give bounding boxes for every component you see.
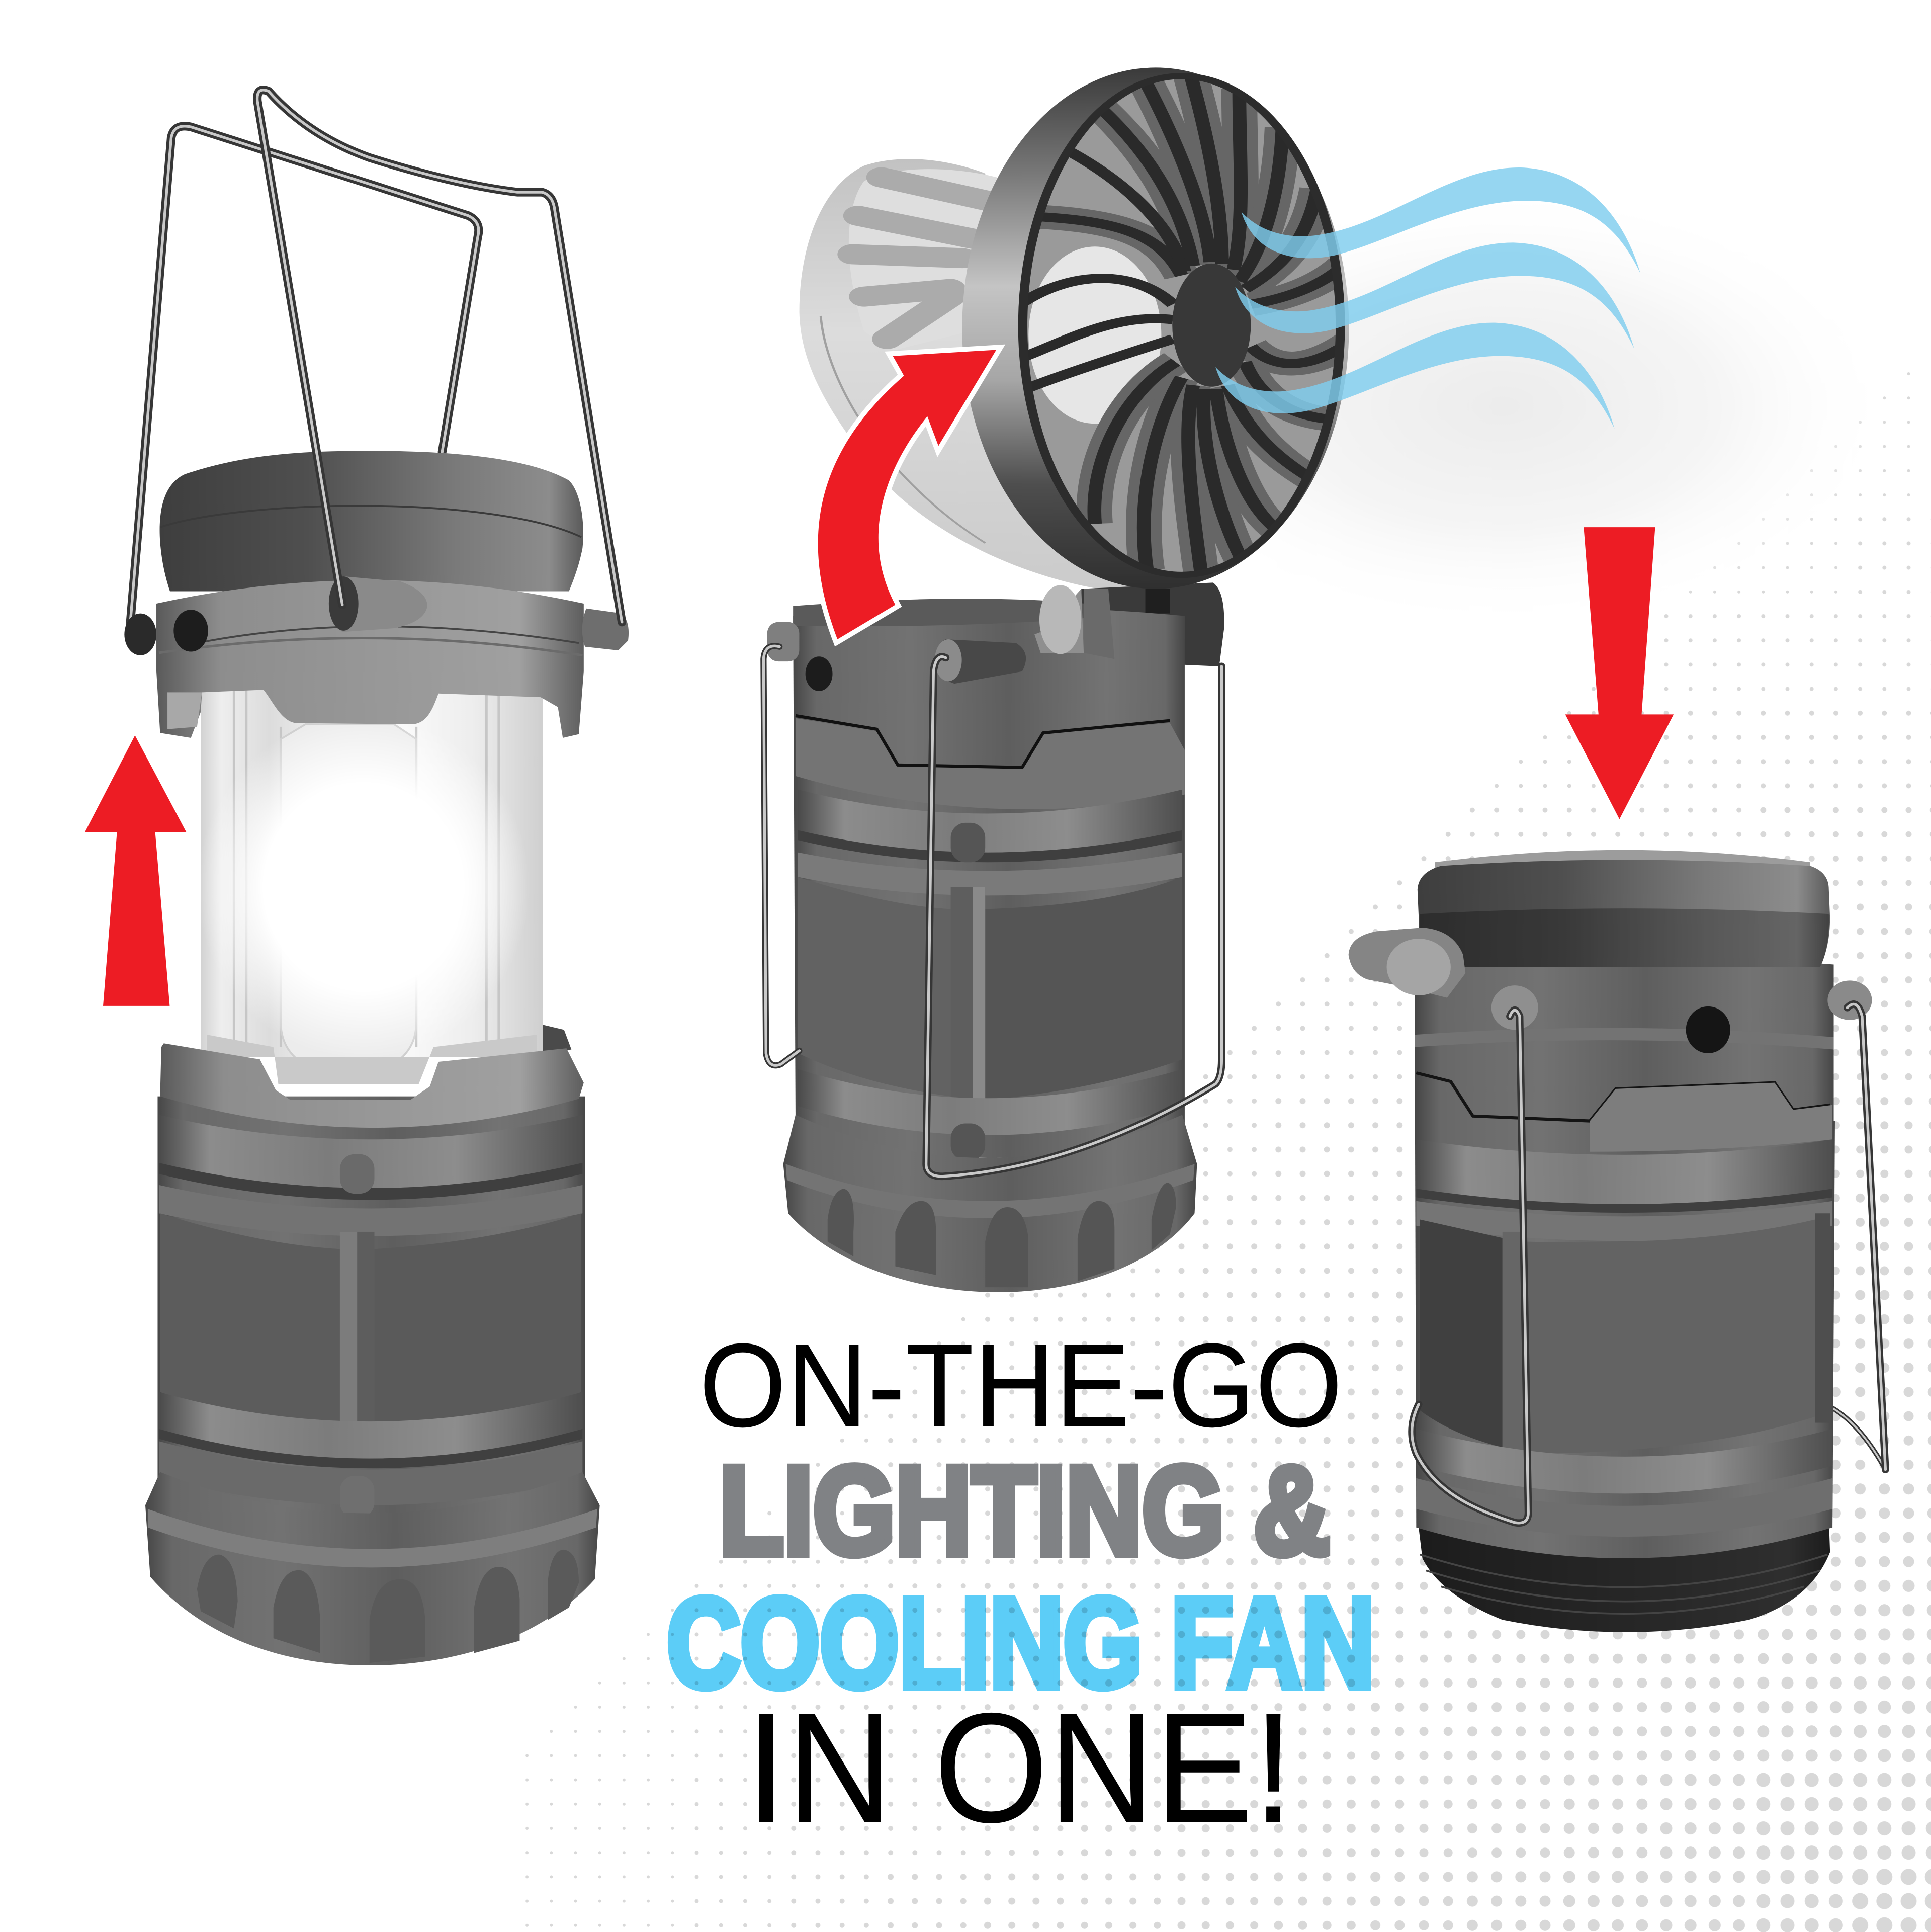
- headline line 2: LIGHTING &: [719, 1441, 1330, 1580]
- left lantern: extended with light on: [124, 90, 629, 1665]
- right lantern collar with slot: [1415, 957, 1834, 1155]
- fan head: [962, 66, 1355, 589]
- headline line 1: ON-THE-GO: [699, 1319, 1343, 1452]
- right lantern body: [1415, 1121, 1835, 1558]
- left lantern grip flange: [145, 1472, 600, 1665]
- right lantern: collapsed: [1349, 850, 1885, 1632]
- left lantern buttons and pegs: [124, 576, 629, 655]
- middle lantern grip flange: [783, 1115, 1197, 1292]
- headline line 3: COOLING FAN: [667, 1572, 1375, 1714]
- left lantern lower body: [157, 1097, 585, 1537]
- fan opening and blades: [1027, 79, 1336, 572]
- left lantern glowing glass: [197, 688, 543, 1084]
- fan outer ring: [962, 67, 1349, 589]
- right lantern pegs: [1491, 980, 1872, 1030]
- middle lantern silver disc: [1034, 585, 1114, 659]
- middle lantern body: [793, 599, 1185, 1160]
- headline line 4: IN ONE!: [746, 1680, 1294, 1855]
- right lantern side lever: [1349, 928, 1465, 998]
- down arrow: [1565, 527, 1674, 819]
- right lantern back wire: [1830, 1407, 1885, 1470]
- middle lantern left peg and button: [767, 622, 833, 691]
- ghost fan: previous position: [800, 159, 1170, 589]
- middle lantern handle wires: [763, 646, 1221, 1177]
- fan hub: [1172, 264, 1251, 387]
- fan inner rim: [1023, 76, 1340, 575]
- right lantern top cap: [1418, 850, 1830, 967]
- right lantern handle wires: [1412, 1004, 1885, 1523]
- right lantern black threaded base: [1418, 1518, 1830, 1632]
- left lantern base collar: [160, 1025, 584, 1128]
- left lantern top cap: [160, 451, 583, 592]
- hinge and fan mount: [1081, 582, 1224, 666]
- middle lantern: fan raised: [763, 585, 1221, 1292]
- soft grey glow behind air flow: [1108, 185, 1896, 628]
- left lantern front handle wire: [257, 90, 622, 622]
- halftone dot pattern: [491, 313, 1931, 1932]
- air flow waves: [1215, 167, 1640, 429]
- curved red rotation arrow: [818, 350, 996, 639]
- up arrow: [85, 735, 186, 1006]
- right lantern button: [1686, 1006, 1730, 1053]
- middle lantern front peg: [935, 639, 1026, 684]
- left lantern back handle wire: [129, 126, 479, 634]
- headline: [667, 1319, 1375, 1855]
- left lantern upper collar: [156, 580, 584, 738]
